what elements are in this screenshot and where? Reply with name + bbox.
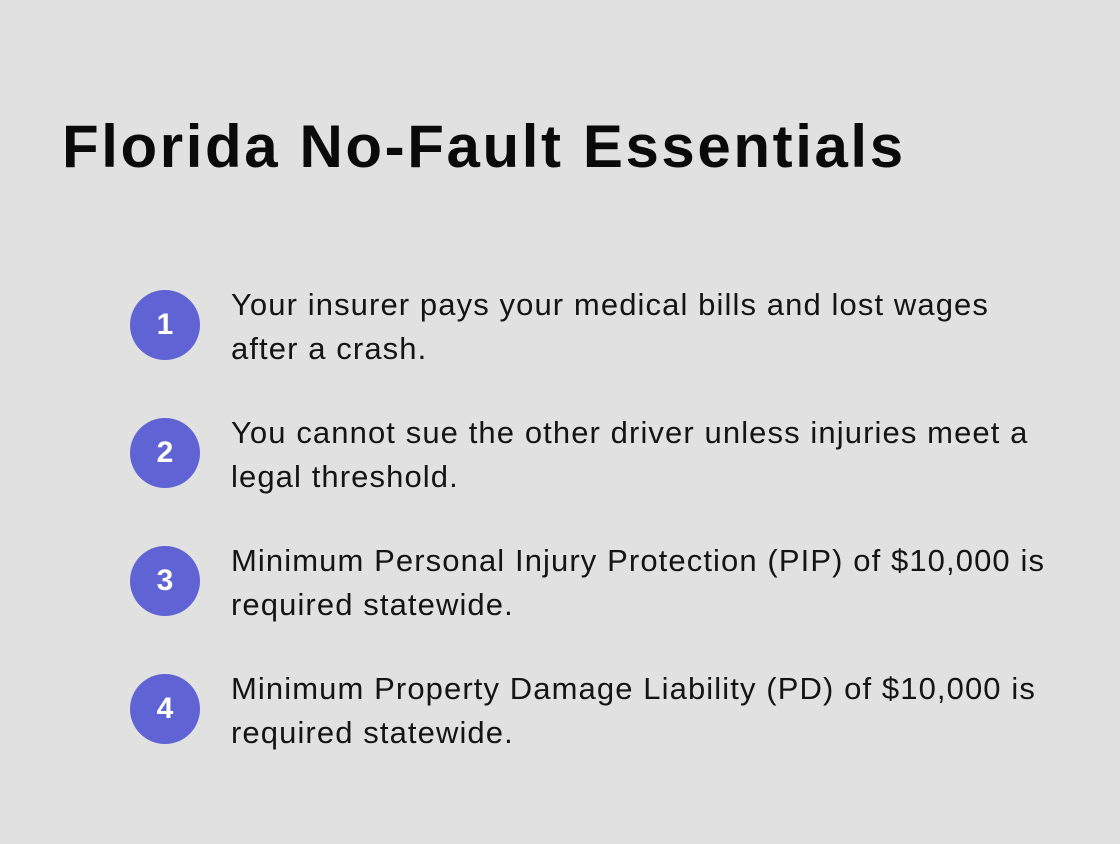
text 3: required statewide. (231, 587, 514, 622)
text 3: Minimum Personal Injury Protection (PIP) of $10,000 is (231, 543, 1045, 578)
text 2 (231, 415, 1029, 494)
badge 3 (130, 546, 200, 616)
badge 1 (130, 290, 200, 360)
badge 1: 1 (157, 308, 173, 341)
badge 2: 2 (157, 436, 173, 469)
text 2: You cannot sue the other driver unless injuries meet a (231, 415, 1029, 450)
badge 4 (130, 674, 200, 744)
badge 3: 3 (157, 564, 173, 597)
item 2 (130, 415, 1029, 494)
text 2: legal threshold. (231, 459, 459, 494)
text 1: Your insurer pays your medical bills and lost wages (231, 287, 989, 322)
text 1 (231, 287, 989, 366)
title: Florida No-Fault Essentials (62, 113, 906, 180)
item 4 (130, 671, 1036, 750)
text 4: Minimum Property Damage Liability (PD) of $10,000 is (231, 671, 1036, 706)
item 1 (130, 287, 989, 366)
text 3 (231, 543, 1045, 622)
badge 4: 4 (157, 692, 173, 725)
badge 2 (130, 418, 200, 488)
text 4 (231, 671, 1036, 750)
item 3 (130, 543, 1045, 622)
text 4: required statewide. (231, 715, 514, 750)
text 1: after a crash. (231, 331, 427, 366)
